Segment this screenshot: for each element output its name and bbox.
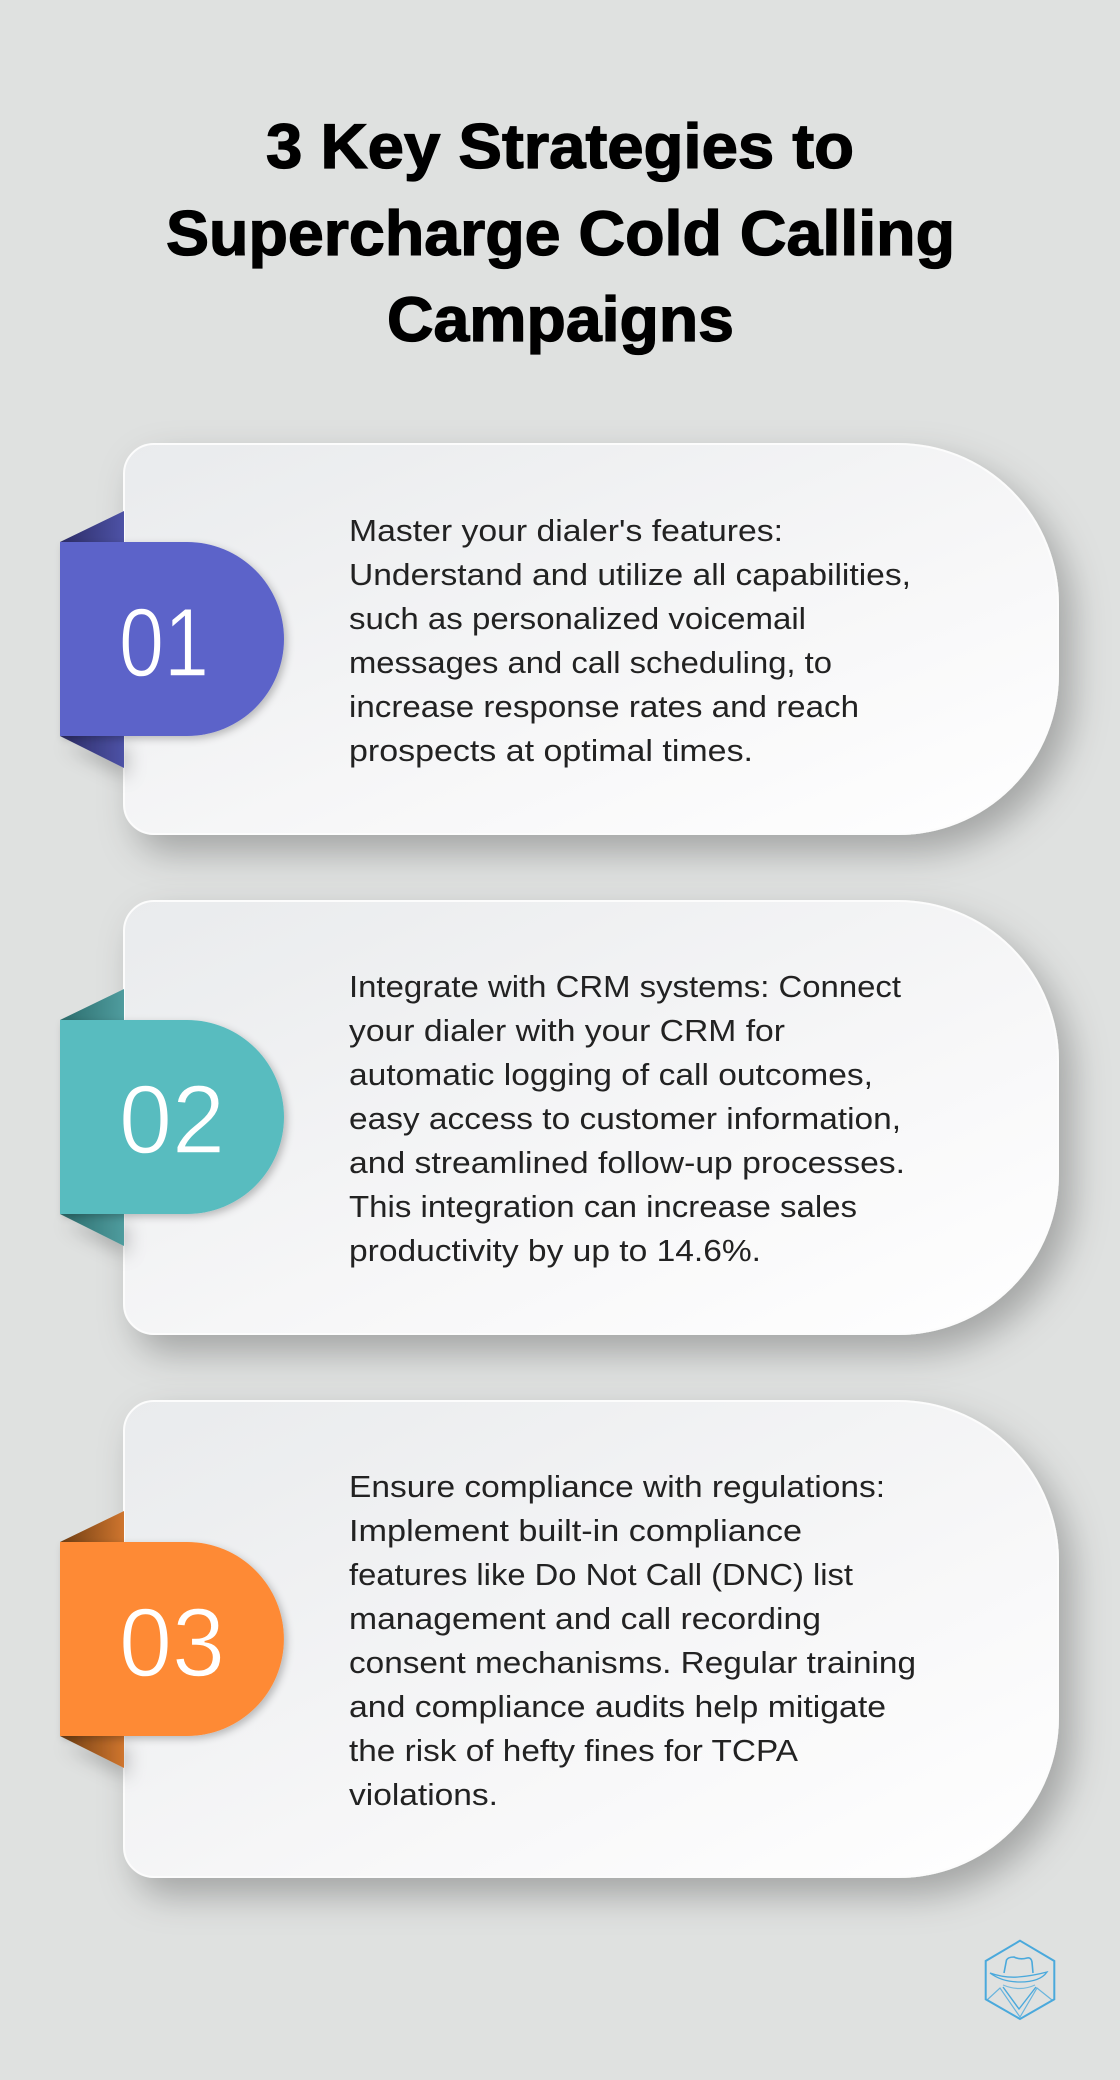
- badge 2: [60, 989, 284, 1246]
- card 3 text: Implement built-in compliance: [349, 1513, 802, 1548]
- panel: strategy 1: [60, 444, 1058, 834]
- title: 3 Key Strategies to: [266, 112, 854, 182]
- card 1 text: messages and call scheduling, to: [349, 645, 832, 680]
- card 1 text: such as personalized voicemail: [349, 601, 806, 636]
- badge 1: [60, 511, 284, 768]
- panel: strategy 2: [60, 901, 1058, 1334]
- card 3 background: [124, 1401, 1058, 1877]
- badge 2: 02: [119, 1065, 225, 1174]
- icon: hexagon logo with hat figure: [986, 1941, 1054, 2019]
- card 1 text: Master your dialer's features:: [349, 513, 783, 548]
- card 1 text: [349, 513, 911, 768]
- card 2 text: [349, 969, 905, 1268]
- panel: strategy 3: [60, 1401, 1058, 1877]
- title: [166, 112, 955, 355]
- card 1 text: Understand and utilize all capabilities,: [349, 557, 911, 592]
- card 2 text: This integration can increase sales: [349, 1189, 857, 1224]
- badge 1: 01: [119, 588, 209, 697]
- card 3 text: [349, 1469, 916, 1812]
- card 1 background: [124, 444, 1058, 834]
- card 3 text: violations.: [349, 1777, 498, 1812]
- card 2 text: your dialer with your CRM for: [349, 1013, 785, 1048]
- card 2 text: Integrate with CRM systems: Connect: [349, 969, 901, 1004]
- card 2 text: productivity by up to 14.6%.: [349, 1233, 761, 1268]
- card 2 text: automatic logging of call outcomes,: [349, 1057, 873, 1092]
- badge 3: 03: [119, 1588, 225, 1697]
- card 3 text: features like Do Not Call (DNC) list: [349, 1557, 853, 1592]
- card 1 text: prospects at optimal times.: [349, 733, 753, 768]
- card 3 text: management and call recording: [349, 1601, 821, 1636]
- card 2 background: [124, 901, 1058, 1334]
- title: Supercharge Cold Calling: [166, 199, 955, 269]
- card 2 text: and streamlined follow-up processes.: [349, 1145, 905, 1180]
- card 2 text: easy access to customer information,: [349, 1101, 901, 1136]
- card 3 text: Ensure compliance with regulations:: [349, 1469, 885, 1504]
- card 3 text: the risk of hefty fines for TCPA: [349, 1733, 798, 1768]
- card 3 text: consent mechanisms. Regular training: [349, 1645, 916, 1680]
- title: Campaigns: [387, 285, 734, 355]
- badge 3: [60, 1511, 284, 1768]
- card 1 text: increase response rates and reach: [349, 689, 859, 724]
- card 3 text: and compliance audits help mitigate: [349, 1689, 886, 1724]
